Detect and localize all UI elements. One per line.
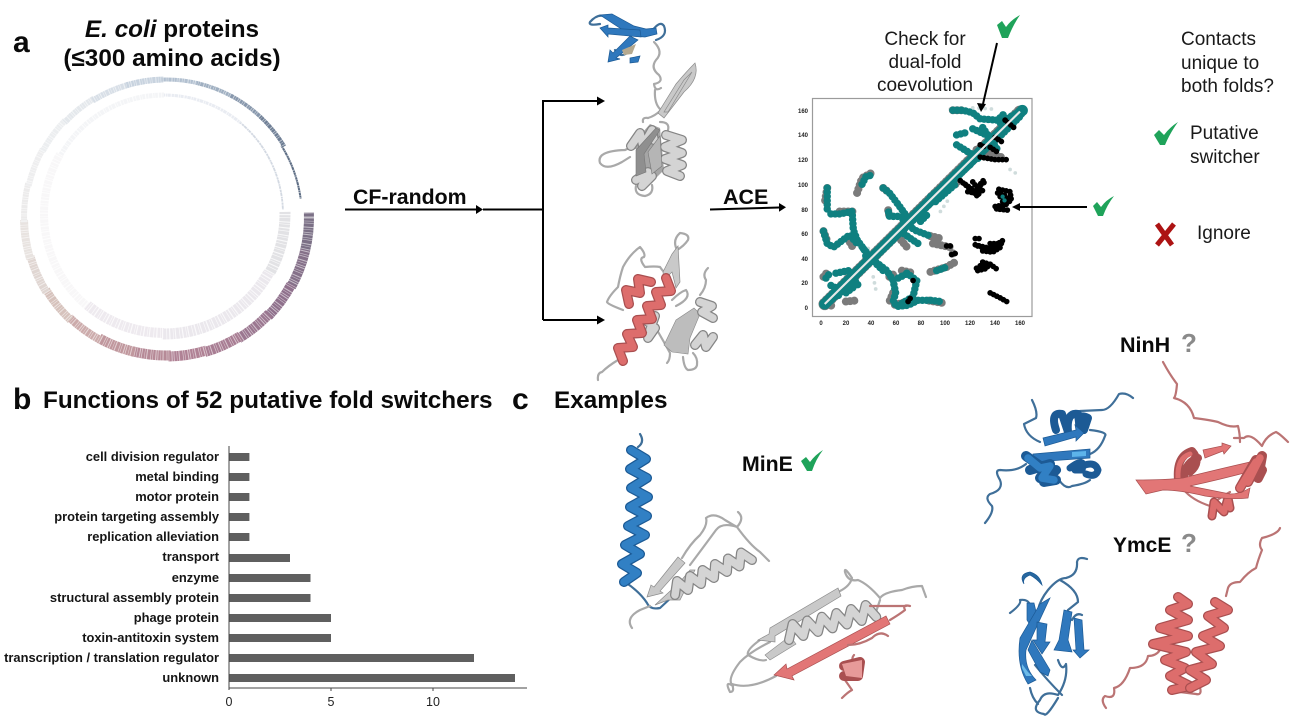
contact map: 80 — [801, 208, 809, 214]
contact map: 0 — [805, 306, 809, 312]
label: MinE: MinE — [742, 452, 793, 476]
icon: question mark NinH: ? — [1181, 328, 1197, 358]
axis labels — [819, 321, 1026, 327]
bar chart: 10 — [426, 695, 440, 709]
bar chart: cell division regulator — [86, 449, 219, 464]
label: ACE: ACE — [723, 185, 768, 209]
contact map: 160 — [798, 109, 809, 115]
text: putative switcher: Putative — [1190, 123, 1259, 144]
text: contacts unique: unique to — [1181, 53, 1259, 74]
bar chart: 0 — [226, 695, 233, 709]
bar chart: unknown — [162, 670, 219, 685]
arrow: to lower contacts — [1012, 203, 1087, 211]
contact points — [823, 108, 1023, 306]
contact map: 60 — [801, 232, 809, 238]
bar chart: metal binding — [135, 469, 219, 484]
text: check for dual-fold coevolution: Check for — [884, 29, 966, 50]
arrow: ACE — [710, 203, 786, 212]
axis labels: 160 — [1015, 321, 1026, 327]
bar chart: replication alleviation — [87, 529, 219, 544]
axis labels: 120 — [965, 321, 976, 327]
label: YmcE: YmcE — [1113, 534, 1171, 557]
panel label a: a — [13, 26, 30, 59]
icon: red X — [1157, 224, 1174, 245]
protein: MinE fold 2 — [728, 570, 926, 698]
bar chart: transcription / translation regulator — [4, 650, 219, 665]
bar chart: protein targeting assembly — [54, 509, 220, 524]
arrow: to upper contacts — [977, 43, 997, 112]
text: check for dual-fold coevolution: coevolution — [877, 75, 973, 96]
contact map: 20 — [801, 281, 809, 287]
icon: check mark small — [1093, 196, 1114, 216]
protein: YmcE fold 1 — [1010, 558, 1089, 715]
contact map: 100 — [798, 183, 809, 189]
label: CF-random: CF-random — [353, 185, 467, 209]
text: ignore: Ignore — [1197, 223, 1251, 244]
icon: question mark YmcE: ? — [1181, 528, 1197, 558]
bar chart: motor protein — [135, 489, 219, 504]
icon: check mark top — [997, 15, 1020, 38]
icon: check MinE — [801, 450, 823, 471]
contact map: 120 — [798, 158, 809, 164]
axis labels: 60 — [893, 321, 900, 327]
axis labels: 100 — [940, 321, 951, 327]
predicted structure: red-gray fold — [598, 233, 713, 380]
text: check for dual-fold coevolution: dual-fold — [889, 52, 961, 73]
title: E. coli proteins: E. coli proteins — [85, 16, 259, 43]
text: contacts unique: Contacts — [1181, 29, 1256, 50]
axis labels: 40 — [868, 321, 875, 327]
panel label b: b — [13, 383, 31, 416]
bar chart: phage protein — [134, 610, 219, 625]
bar chart: enzyme — [172, 570, 219, 585]
predicted structure: blue-gray fold — [590, 14, 696, 196]
bar chart: structural assembly protein — [50, 590, 219, 605]
heading: examples: Examples — [554, 387, 667, 414]
text: contacts unique: both folds? — [1181, 76, 1274, 97]
axis labels: 20 — [843, 321, 850, 327]
circular proteome ring — [0, 18, 365, 417]
axis labels: 80 — [918, 321, 925, 327]
bar chart — [4, 446, 527, 709]
label: NinH: NinH — [1120, 333, 1170, 357]
title: E. coli proteins: (≤300 amino acids) — [63, 45, 281, 72]
contact map: 140 — [798, 133, 809, 139]
bar chart: toxin-antitoxin system — [82, 630, 219, 645]
protein: NinH fold 2 — [1136, 362, 1288, 516]
contact map: 40 — [801, 257, 809, 263]
panel label c: c — [512, 383, 529, 416]
bar chart: 5 — [328, 695, 335, 709]
protein: NinH fold 1 — [985, 394, 1133, 523]
icon: check mark large — [1154, 122, 1178, 145]
text: putative switcher: switcher — [1190, 147, 1260, 168]
branching arrows to predicted folds — [345, 96, 605, 324]
axis labels: 0 — [819, 321, 823, 327]
protein: MinE fold 1 — [622, 434, 769, 628]
heading: functions: Functions of 52 putative fold switchers — [43, 387, 493, 414]
contact map — [798, 98, 1032, 327]
protein: YmcE fold 2 — [1103, 528, 1280, 708]
bar chart: transport — [162, 549, 220, 564]
axis labels: 140 — [990, 321, 1001, 327]
